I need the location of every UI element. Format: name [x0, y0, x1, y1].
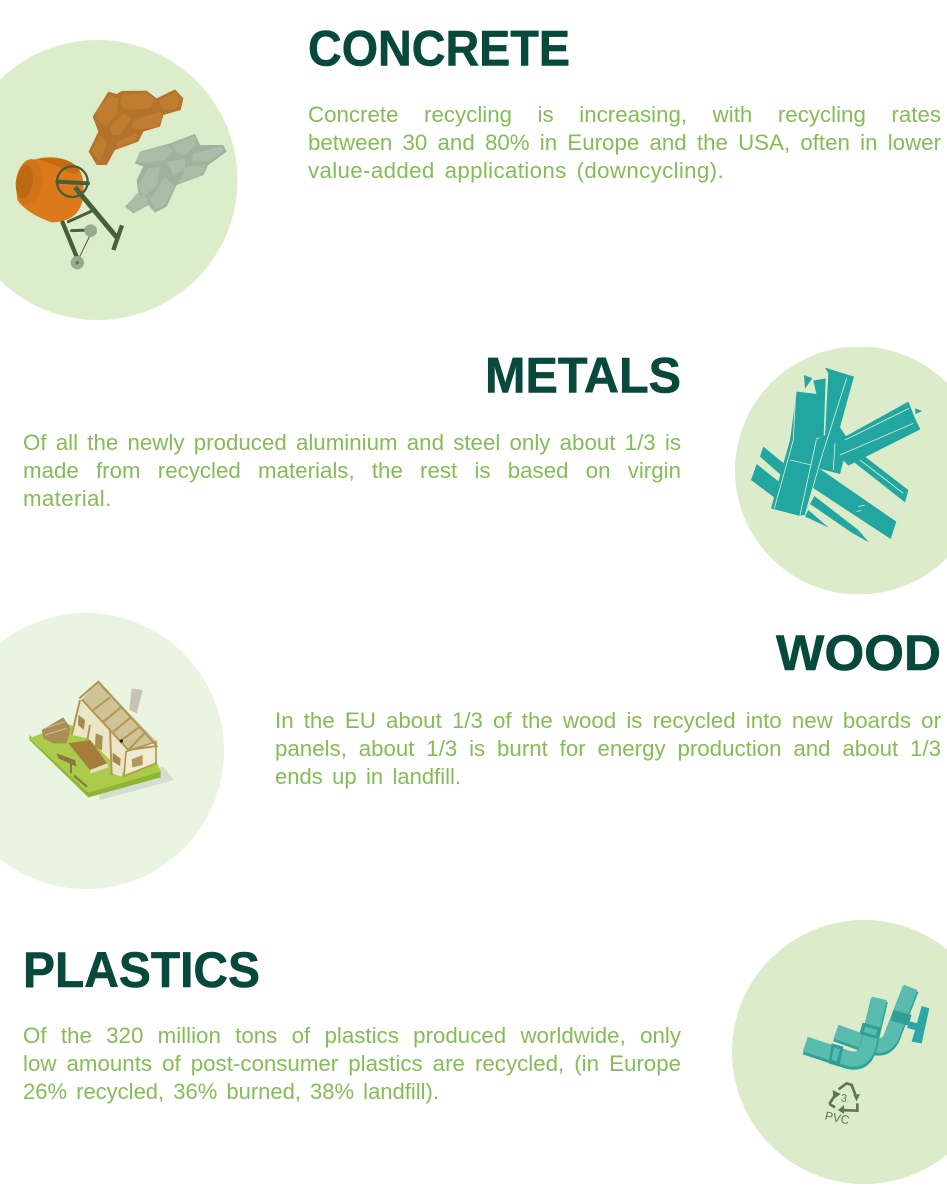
heading: wood: WOOD — [776, 625, 941, 681]
text: concrete description — [308, 102, 941, 183]
icon: timber house in circle — [0, 613, 224, 889]
panel: wood — [0, 613, 941, 889]
text: wood description: ends up in landfill. — [275, 764, 461, 789]
text: concrete description: value-added applications (downcycling). — [308, 158, 724, 183]
text: concrete description: Concrete recycling is increasing, with recycling rates — [308, 102, 941, 127]
icon: PVC pipes in circle: 3 — [840, 1092, 848, 1105]
panel: metals — [23, 347, 947, 594]
text: metals description — [23, 430, 681, 511]
text: metals description: material. — [23, 486, 112, 511]
icon: cement mixer and bricks in circle — [0, 40, 238, 320]
icon: steel beams in circle — [735, 347, 947, 594]
text: plastics description — [23, 1023, 681, 1104]
icon: PVC pipes in circle: PVC — [824, 1109, 851, 1127]
text: plastics description: low amounts of post-consumer plastics are recycled, (in Europe — [23, 1051, 681, 1076]
text: wood description: In the EU about 1/3 of the wood is recycled into new boards or — [275, 708, 941, 733]
text: metals description: Of all the newly produced aluminium and steel only about 1/3 is — [23, 430, 681, 455]
text: plastics description: Of the 320 million tons of plastics produced worldwide, only — [23, 1023, 681, 1048]
heading: metals: METALS — [485, 348, 681, 404]
panel: plastics — [23, 920, 947, 1184]
text: metals description: made from recycled materials, the rest is based on virgin — [23, 458, 681, 483]
heading: concrete: CONCRETE — [308, 20, 570, 76]
text: concrete description: between 30 and 80% in Europe and the USA, often in lower — [308, 130, 941, 155]
text: wood description: panels, about 1/3 is burnt for energy production and about 1/3 — [275, 736, 941, 761]
heading: plastics: PLASTICS — [23, 942, 260, 998]
text: wood description — [275, 708, 941, 789]
text: plastics description: 26% recycled, 36% burned, 38% landfill). — [23, 1079, 439, 1104]
icon: PVC pipes in circle — [732, 920, 947, 1184]
panel: concrete — [0, 20, 941, 320]
